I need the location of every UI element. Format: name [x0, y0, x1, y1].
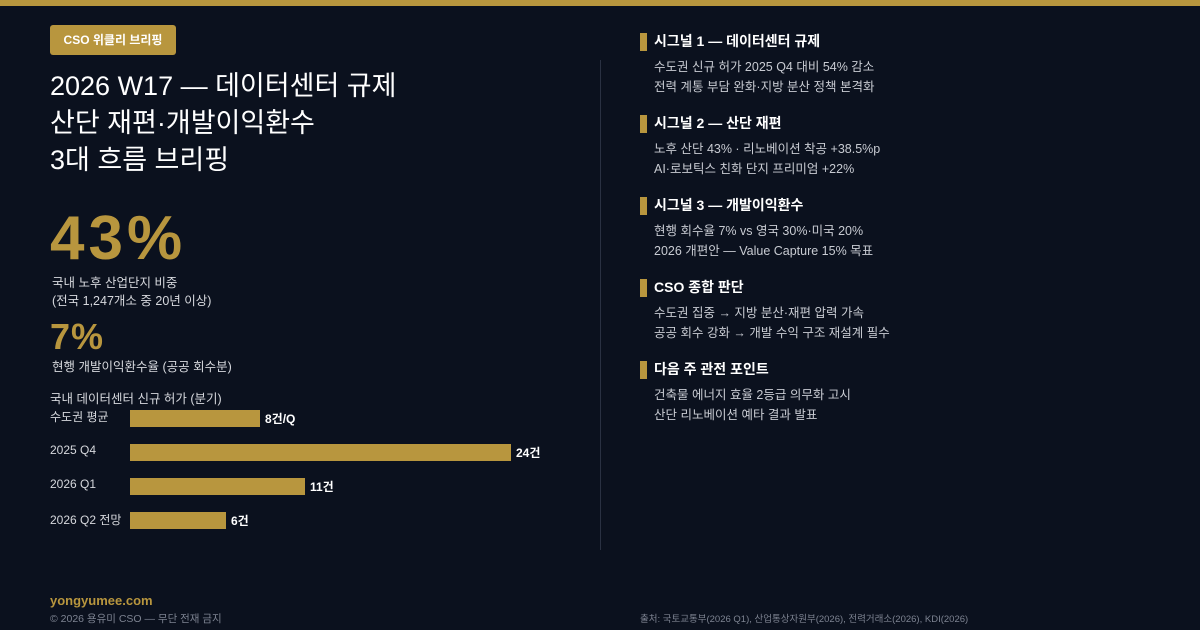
- bar chart: 8건/Q: [265, 412, 295, 426]
- stat: 43%: (전국 1,247개소 중 20년 이상): [52, 294, 211, 308]
- title: 3대 흐름 브리핑: [50, 145, 229, 175]
- CSO judgment: CSO 종합 판단: [654, 279, 744, 295]
- signal 2: 시그널 2 — 산단 재편: [654, 115, 782, 131]
- signal 2: 노후 산단 43% · 리노베이션 착공 +38.5%p: [654, 142, 880, 156]
- stat: 43%: [50, 204, 211, 308]
- signal 2: AI·로보틱스 친화 단지 프리미엄 +22%: [654, 162, 854, 176]
- next week: 다음 주 관전 포인트: [654, 361, 769, 377]
- signal 3: [640, 197, 873, 258]
- signal 3: 2026 개편안 — Value Capture 15% 목표: [654, 244, 873, 258]
- signal 1: 전력 계통 부담 완화·지방 분산 정책 본격화: [654, 80, 875, 94]
- divider: [600, 60, 601, 550]
- stat: 7%: 7%: [50, 316, 104, 357]
- bar chart: 수도권 평균: [50, 410, 109, 424]
- footer brand: yongyumee.com: [50, 593, 153, 608]
- bar chart: 2026 Q2 전망: [50, 513, 121, 527]
- source: 출처: 국토교통부(2026 Q1), 산업통상자원부(2026), 전력거래소(2026), KDI(2026): [640, 614, 968, 625]
- title: [50, 71, 396, 175]
- title: 산단 재편·개발이익환수: [50, 108, 315, 138]
- CSO judgment: 공공 회수 강화 → 개발 수익 구조 재설계 필수: [654, 326, 890, 340]
- bar chart: 2025 Q4: [50, 443, 96, 457]
- stat: 7%: [50, 316, 232, 374]
- top accent bar: [0, 0, 1200, 6]
- CSO judgment: [640, 279, 890, 340]
- copyright: © 2026 용유미 CSO — 무단 전재 금지: [50, 613, 222, 625]
- signal 1: 수도권 신규 허가 2025 Q4 대비 54% 감소: [654, 60, 874, 74]
- signal 1: 시그널 1 — 데이터센터 규제: [654, 33, 820, 49]
- CSO judgment: 수도권 집중 → 지방 분산·재편 압력 가속: [654, 306, 864, 320]
- stat: 43%: 43%: [50, 204, 186, 273]
- signal 3: 시그널 3 — 개발이익환수: [654, 197, 803, 213]
- badge: CSO 위클리 브리핑: [64, 33, 162, 47]
- bar chart: 6건: [231, 514, 249, 528]
- badge: [50, 25, 176, 55]
- next week: 산단 리노베이션 예타 결과 발표: [654, 408, 817, 422]
- bar chart: 국내 데이터센터 신규 허가 (분기): [50, 392, 222, 406]
- title: 2026 W17 — 데이터센터 규제: [50, 71, 396, 101]
- signal 2: [640, 115, 880, 176]
- bar chart: 2026 Q1: [50, 477, 96, 491]
- signal 1: [640, 33, 875, 94]
- bar chart: 11건: [310, 480, 334, 494]
- bar chart: [50, 392, 540, 529]
- stat: 43%: 국내 노후 산업단지 비중: [52, 276, 177, 290]
- signal 3: 현행 회수율 7% vs 영국 30%·미국 20%: [654, 224, 863, 238]
- next week: 건축물 에너지 효율 2등급 의무화 고시: [654, 388, 851, 402]
- bar chart: 24건: [516, 446, 540, 460]
- stat: 7%: 현행 개발이익환수율 (공공 회수분): [52, 360, 232, 374]
- next week: [640, 361, 851, 422]
